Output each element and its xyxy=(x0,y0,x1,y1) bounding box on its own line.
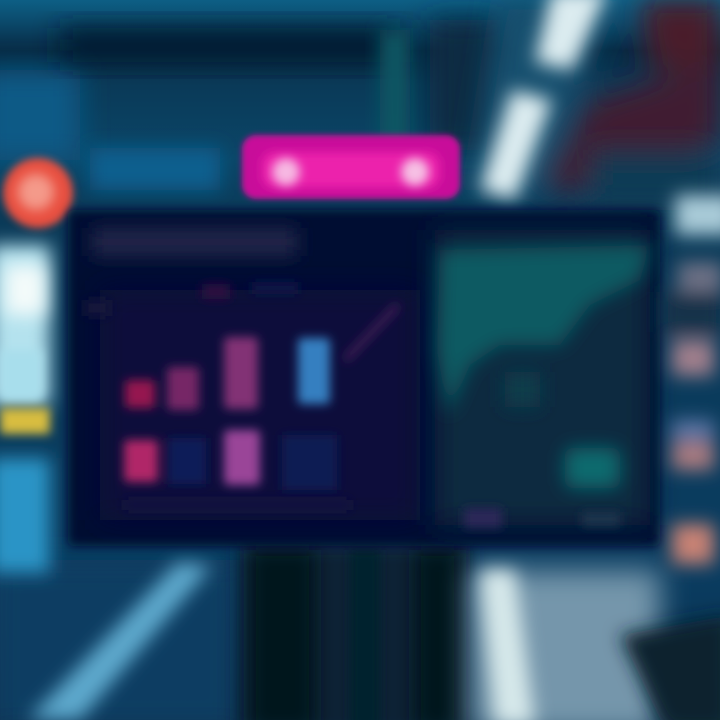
side icons right xyxy=(662,262,720,564)
bar chart xyxy=(85,282,337,490)
panel: chart area xyxy=(100,290,420,520)
lower floor elements xyxy=(28,545,720,720)
magenta pill button xyxy=(242,135,460,199)
dark central columns xyxy=(240,545,470,720)
diagonal light stripe xyxy=(28,562,212,720)
light streak top right xyxy=(480,0,608,200)
left light column xyxy=(0,245,50,573)
world map xyxy=(437,245,650,488)
right side light xyxy=(675,195,720,235)
axis labels xyxy=(125,500,620,528)
icon: red circle xyxy=(3,158,73,228)
panel: dashboard xyxy=(68,210,660,546)
heading bar xyxy=(92,228,297,256)
trend line xyxy=(345,305,398,360)
maroon ceiling panel xyxy=(470,0,720,210)
panel: map area xyxy=(435,230,650,525)
